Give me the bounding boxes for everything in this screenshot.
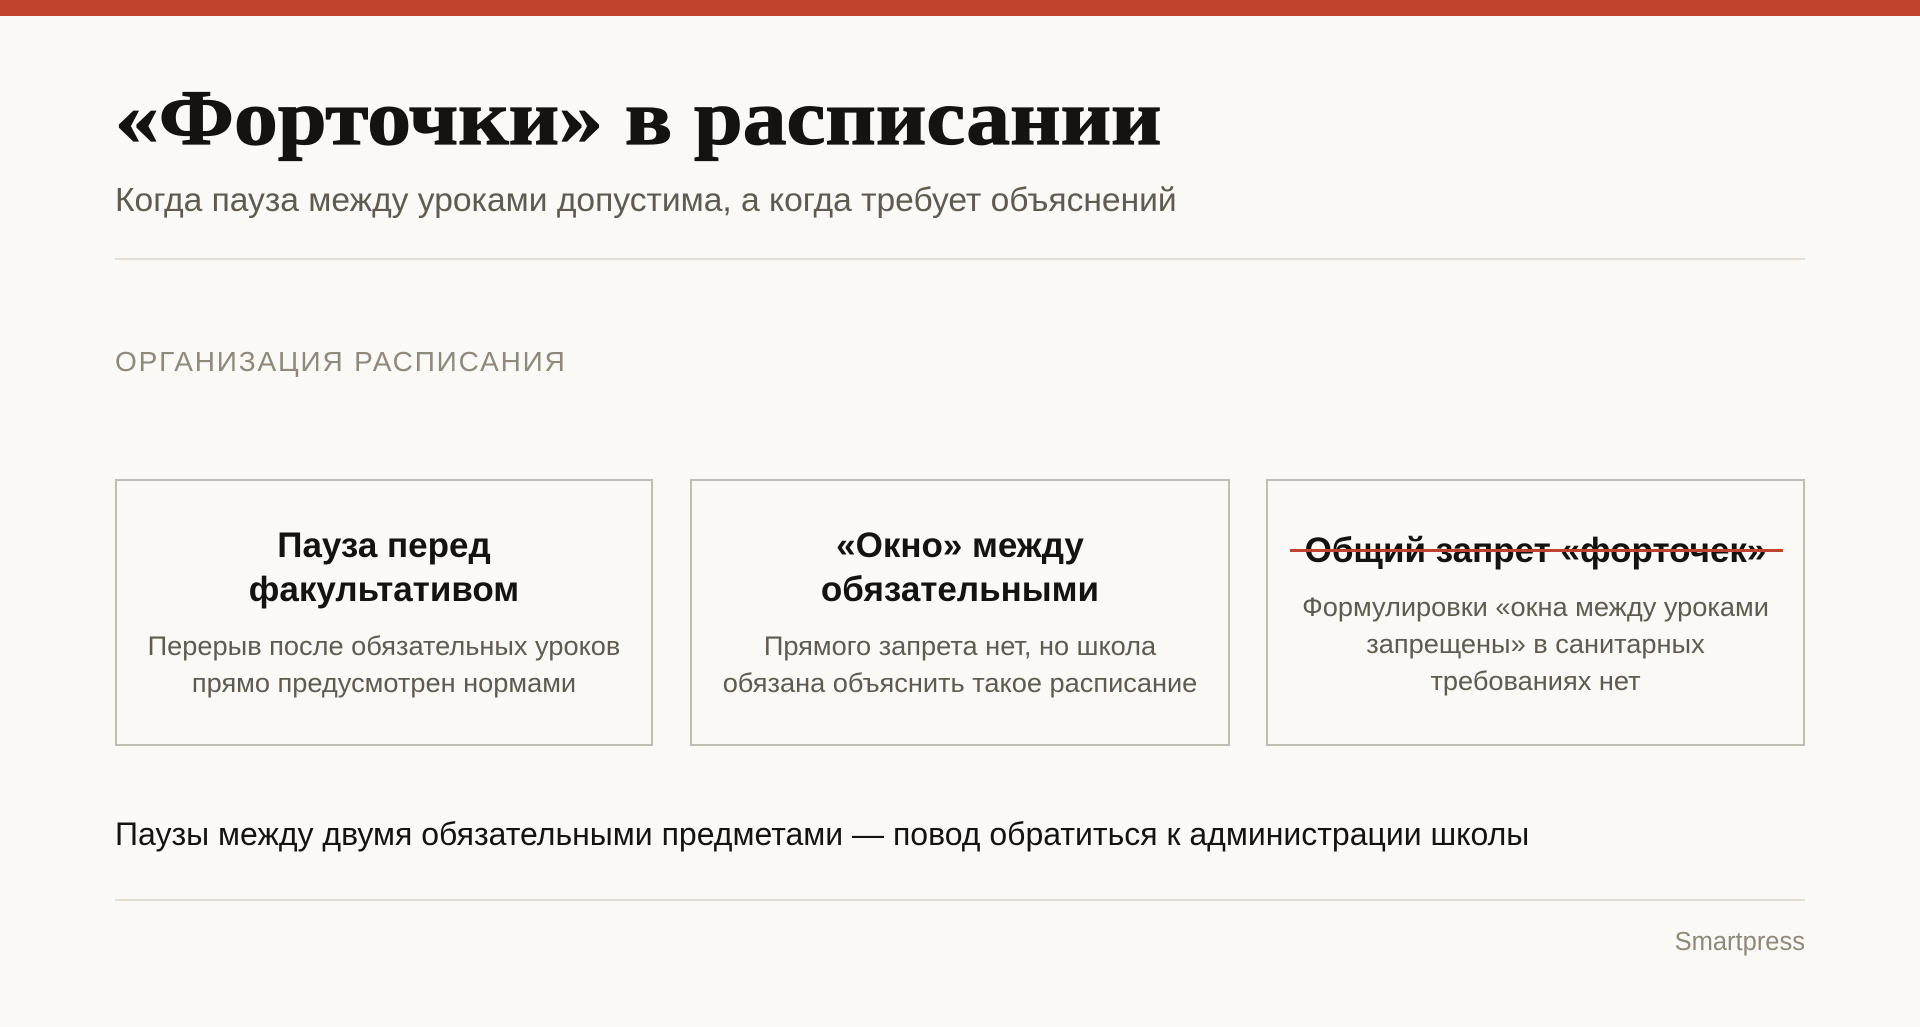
card heading: [249, 526, 519, 609]
card: window between mandatory lessons: [690, 479, 1230, 746]
top accent bar: [0, 0, 1920, 16]
source credit: Smartpress: [1675, 928, 1805, 956]
card heading: обязательными: [821, 570, 1099, 609]
card heading: факультативом: [249, 570, 519, 609]
card heading: Пауза перед: [277, 526, 491, 565]
card description: требованиях нет: [1430, 665, 1641, 696]
card description: [148, 630, 620, 698]
card: pause before elective: [115, 479, 653, 746]
card description: [723, 630, 1197, 698]
card heading: «Окно» между: [836, 526, 1084, 565]
card description: Формулировки «окна между уроками: [1302, 591, 1769, 622]
card description: запрещены» в санитарных: [1366, 628, 1705, 659]
card description: Перерыв после обязательных уроков: [148, 630, 620, 661]
card description: обязана объяснить такое расписание: [723, 667, 1197, 698]
subtitle: Когда пауза между уроками допустима, а когда требует объяснений: [115, 182, 1177, 219]
strike line: [1290, 549, 1783, 552]
card description: прямо предусмотрен нормами: [192, 667, 576, 698]
struck-through heading: Общий запрет «форточек»: [1305, 531, 1766, 570]
title: «Форточки» в расписании: [115, 74, 1162, 161]
conclusion text: Паузы между двумя обязательными предметами — повод обратиться к администрации школы: [115, 816, 1529, 852]
card heading: [821, 526, 1099, 609]
card description: Прямого запрета нет, но школа: [764, 630, 1156, 661]
card description: [1302, 591, 1769, 696]
card: no general ban: [1266, 479, 1805, 746]
section label: ОРГАНИЗАЦИЯ РАСПИСАНИЯ: [115, 346, 567, 377]
